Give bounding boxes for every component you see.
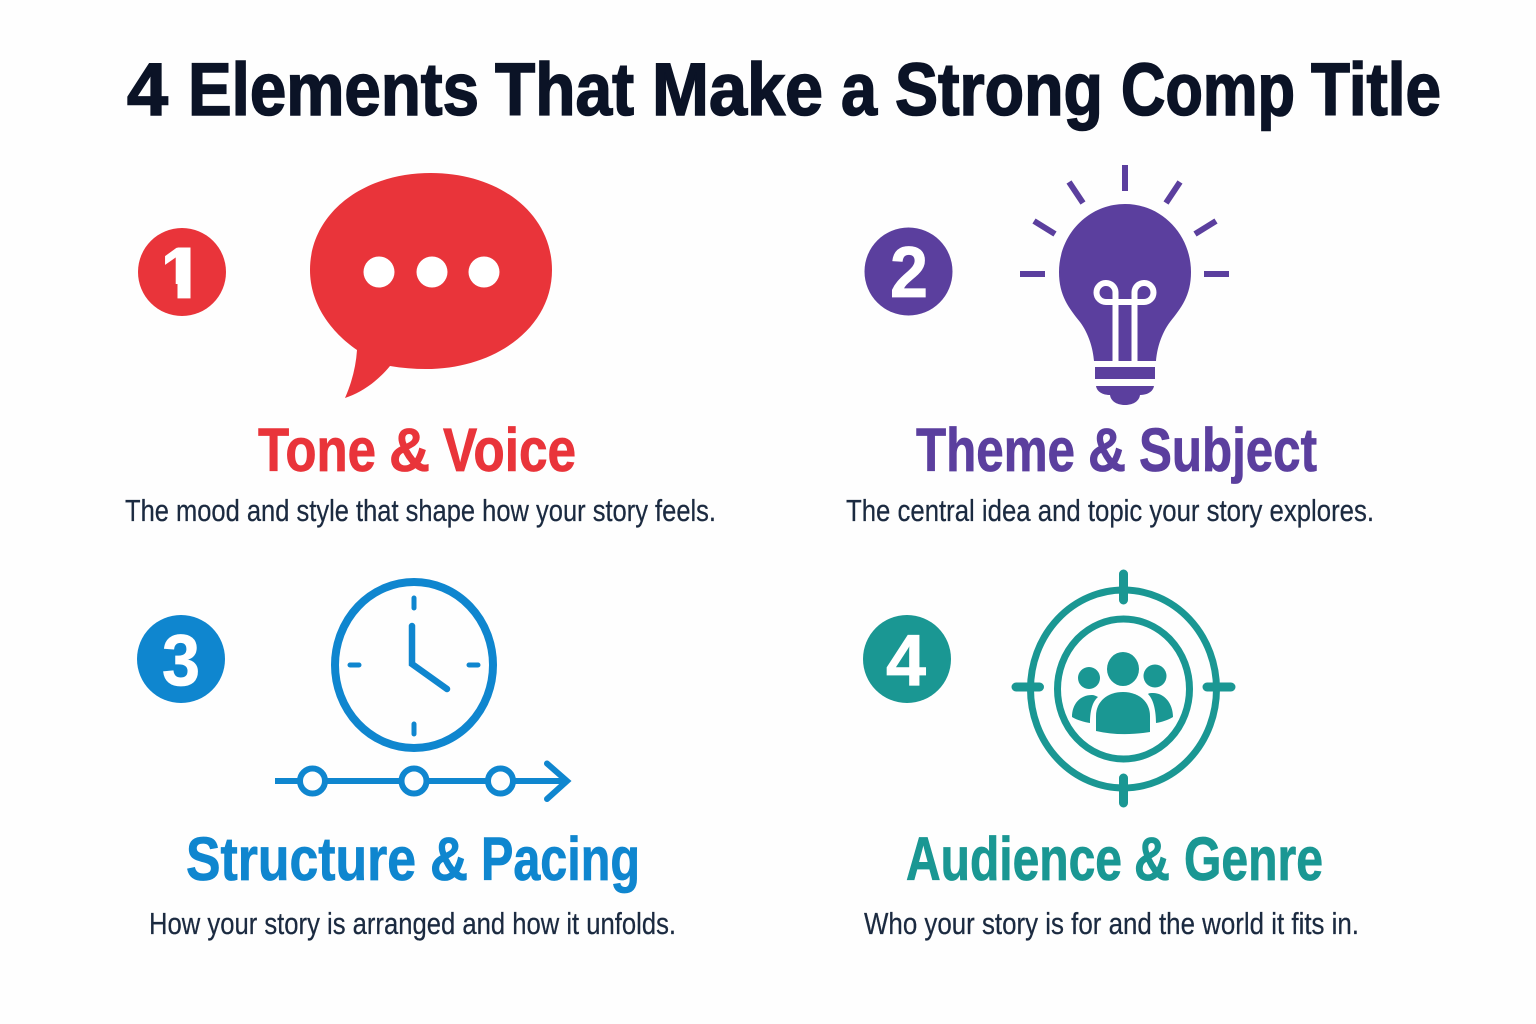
number badge 2: 2 [890, 233, 928, 313]
number badge 4 [863, 615, 951, 703]
title: a [841, 48, 878, 131]
title: Make [652, 48, 823, 131]
description: Structure & Pacing: How your story is arranged and how it unfolds. [149, 906, 676, 941]
description: Tone & Voice: The mood and style that shape how your story feels. [125, 493, 716, 528]
heading: Theme & Subject: Subject [1139, 416, 1317, 484]
description: Audience & Genre: Who your story is for and the world it fits in. [864, 906, 1359, 941]
icon: timeline arrow [275, 764, 567, 799]
heading: Tone & Voice: & [389, 416, 430, 484]
heading: Audience & Genre: Genre [1184, 825, 1323, 893]
heading: Audience & Genre: Audience [906, 825, 1122, 893]
icon: light bulb [1020, 165, 1229, 405]
title: Title [1311, 48, 1441, 131]
number badge 1 [138, 228, 226, 316]
description: Theme & Subject: The central idea and topic your story explores. [846, 493, 1374, 528]
heading: Tone & Voice: Voice [443, 416, 576, 484]
number badge 4: 4 [886, 621, 926, 701]
heading: Theme & Subject: Theme [916, 416, 1075, 484]
icon: audience target [1016, 574, 1231, 803]
panel: theme and subject [846, 165, 1374, 528]
number badge 3 [137, 615, 225, 703]
number badge 1: 1 [161, 234, 197, 314]
icon: speech bubble [310, 173, 552, 398]
heading: Tone & Voice: Tone [258, 416, 376, 484]
heading: Theme & Subject: & [1088, 416, 1126, 484]
heading: Structure & Pacing: Pacing [481, 825, 640, 893]
heading: Audience & Genre: & [1134, 825, 1170, 893]
title: Strong [895, 48, 1103, 131]
icon: clock [335, 582, 493, 748]
panel: audience and genre [863, 574, 1359, 941]
title: 4 [127, 48, 168, 131]
panel: structure and pacing [137, 582, 676, 941]
title: Elements [188, 48, 479, 131]
title: That [495, 48, 634, 131]
heading: Structure & Pacing: & [430, 825, 468, 893]
title: Comp [1121, 48, 1295, 131]
number badge 2 [864, 228, 952, 316]
panel: tone and voice [125, 173, 716, 528]
heading: Structure & Pacing: Structure [186, 825, 416, 893]
number badge 3: 3 [162, 621, 200, 701]
